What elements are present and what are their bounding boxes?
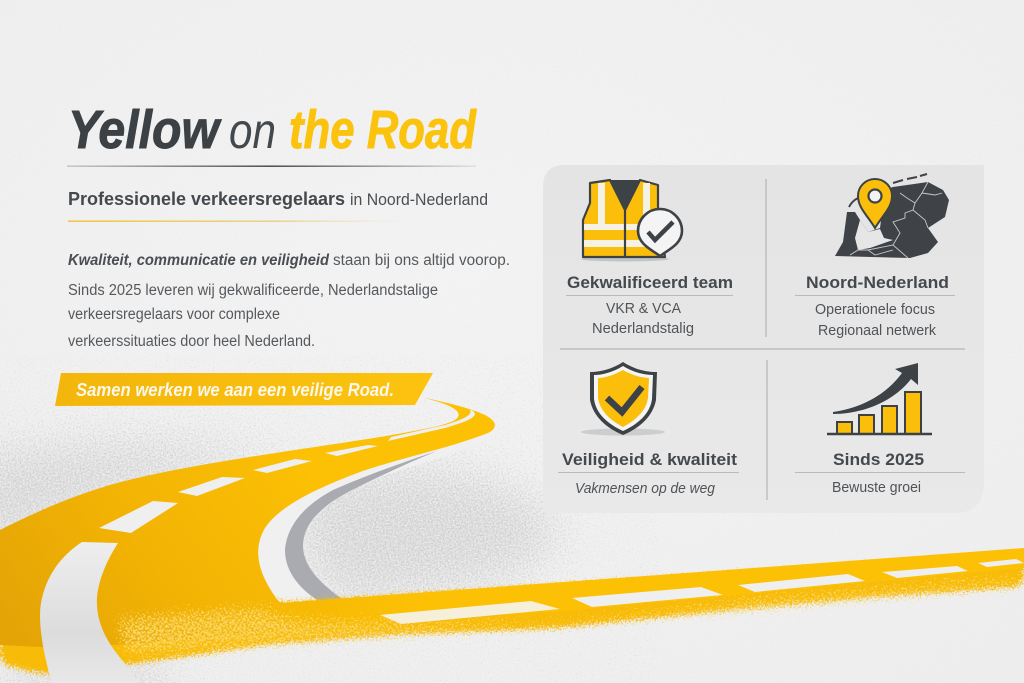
feature: Noord-Nederland	[795, 174, 955, 339]
road surface	[0, 397, 1024, 648]
title: on	[229, 103, 276, 159]
icon: map with pin	[835, 174, 949, 258]
icon: safety vest	[581, 180, 682, 262]
intro text: Kwaliteit, communicatie en veiligheid	[68, 252, 330, 269]
text: Nederlandstalig: Nederlandstalig	[592, 321, 694, 337]
heading: Gekwalificeerd team: Gekwalificeerd team	[567, 273, 733, 292]
road tyre track	[285, 451, 437, 603]
asphalt speckle patches	[0, 435, 567, 683]
title: the Road	[289, 100, 477, 160]
icon: growth chart	[827, 363, 932, 434]
fuzzy lower road edge	[0, 555, 1024, 674]
road illustration	[0, 397, 1024, 683]
subtitle: Professionele verkeersregelaars	[68, 188, 345, 209]
title: Yellow	[68, 100, 222, 160]
centre dashes, curved section	[99, 410, 475, 533]
intro text: staan bij ons altijd voorop.	[333, 252, 510, 269]
feature: since 2025	[795, 363, 965, 496]
centre dashes, straight section	[380, 559, 1024, 624]
subtitle	[68, 188, 488, 209]
slogan banner	[55, 373, 433, 406]
text: VKR and VCA: VKR & VCA	[606, 301, 681, 317]
intro text: verkeerssituaties door heel Nederland.	[68, 333, 315, 350]
intro text: Sinds 2025 leveren wij gekwalificeerde, Nederlandstalige	[68, 282, 438, 299]
heading: Sinds 2025: Sinds 2025	[833, 450, 924, 469]
text: Bewuste groei: Bewuste groei	[832, 480, 921, 496]
slogan banner: Samen werken we aan een veilige Road.	[76, 380, 394, 400]
intro text	[68, 252, 510, 350]
subtitle: in Noord-Nederland	[350, 191, 488, 209]
text: Operationele focus: Operationele focus	[815, 302, 935, 318]
panel: features	[543, 165, 984, 513]
heading: Noord-Nederland: Noord-Nederland	[806, 273, 949, 292]
road shoulder	[256, 423, 503, 606]
heading: Veiligheid and kwaliteit: Veiligheid & kwaliteit	[562, 450, 737, 469]
title	[68, 100, 477, 160]
intro text: verkeersregelaars voor complexe	[68, 306, 280, 323]
pale speckle on fading road	[110, 570, 1024, 662]
left lane stripe	[40, 542, 140, 683]
feature: qualified team	[566, 180, 733, 337]
text: Regionaal netwerk: Regionaal netwerk	[818, 323, 937, 339]
text: Vakmensen op de weg: Vakmensen op de weg	[575, 481, 715, 497]
icon: shield with check	[581, 362, 665, 436]
feature: safety and quality	[558, 362, 739, 497]
